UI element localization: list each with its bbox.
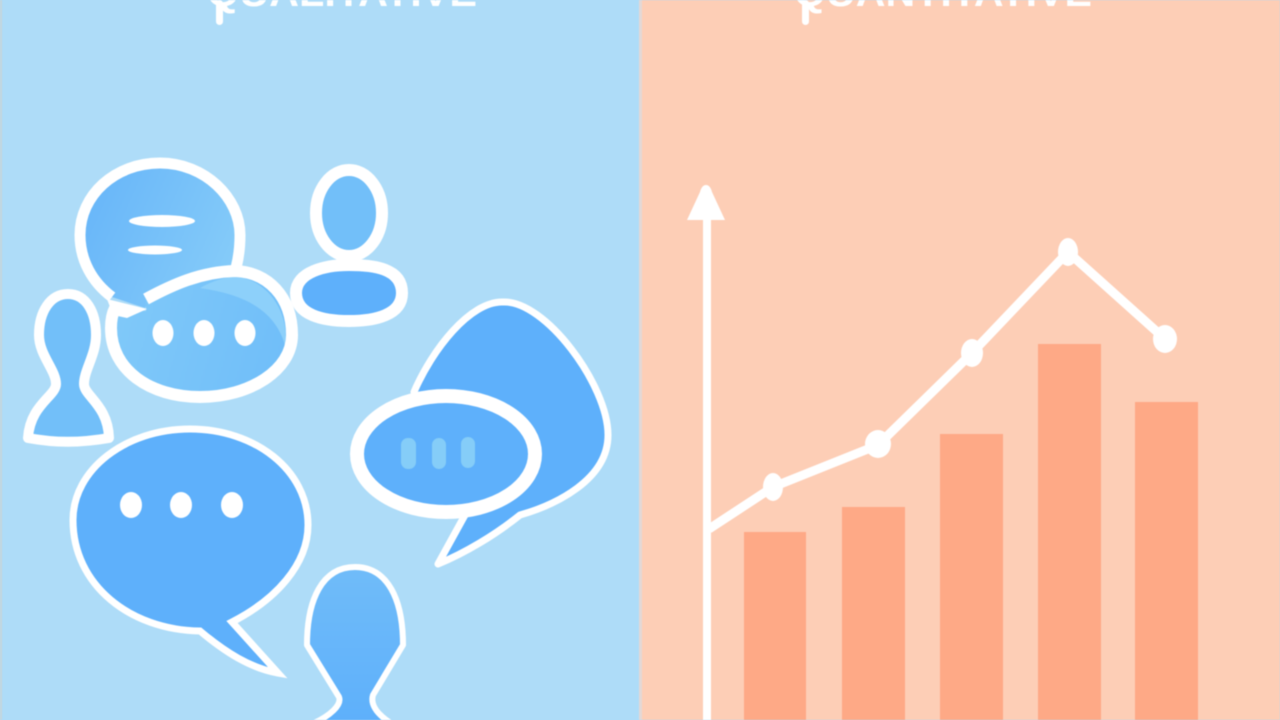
heading: qualitative bbox=[207, 0, 477, 25]
icon: person bottom bbox=[307, 567, 403, 720]
icon: upper left speech bubble with text lines bbox=[80, 163, 240, 308]
icon: large bottom speech bubble bbox=[73, 429, 308, 673]
panel: quantitative background bbox=[639, 0, 1280, 720]
bar chart bbox=[744, 344, 1198, 720]
icon: person top right bbox=[296, 170, 402, 321]
panel: qualitative background bbox=[0, 0, 640, 720]
heading: quantitative bbox=[794, 0, 1092, 25]
line chart bbox=[709, 238, 1177, 529]
arrow: vertical axis bbox=[687, 185, 725, 720]
icon: person left bbox=[28, 294, 109, 442]
icon: large right speech bubble bbox=[357, 302, 608, 564]
icon: speech bubble with three dots bbox=[107, 271, 292, 397]
